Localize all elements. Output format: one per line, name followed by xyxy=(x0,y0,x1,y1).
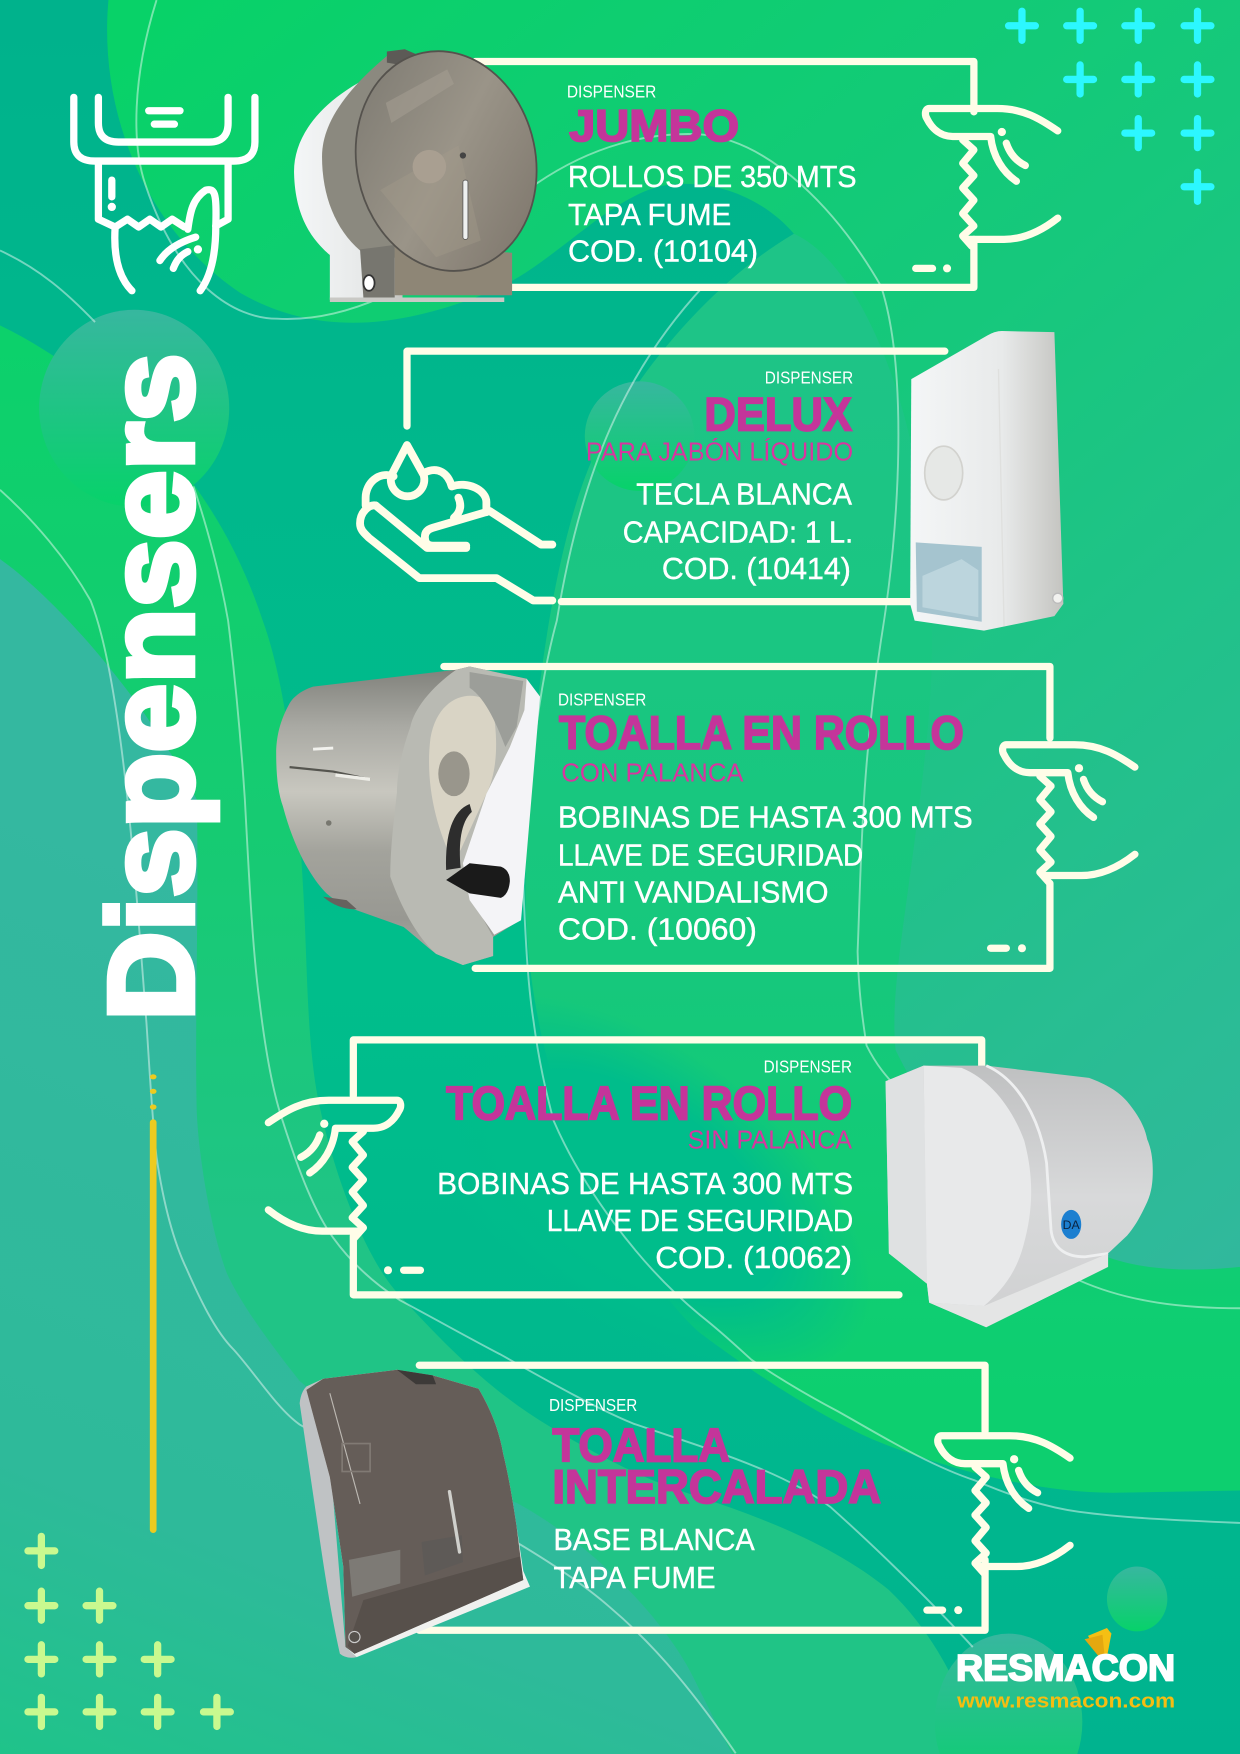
panel 5 text: TAPA FUME xyxy=(553,1562,716,1595)
yellow accent line xyxy=(150,1074,157,1533)
panel 4 text: TOALLA EN ROLLO xyxy=(446,1076,852,1129)
panel 3 text: COD. (10060) xyxy=(558,913,757,946)
panel 5 text: BASE BLANCA xyxy=(553,1524,756,1557)
panel 3 text: TOALLA EN ROLLO xyxy=(559,706,964,759)
panel 5 text: TOALLA xyxy=(552,1418,730,1471)
logo papers icon xyxy=(1085,1628,1111,1658)
panel 4 text: COD. (10062) xyxy=(655,1242,852,1275)
panel 5 text: DISPENSER xyxy=(549,1395,637,1415)
panel 4 text xyxy=(437,1056,853,1275)
panel 3 text: LLAVE DE SEGURIDAD xyxy=(558,839,863,872)
panel 2 text: CAPACIDAD: 1 L. xyxy=(623,516,853,549)
panel 3 text: CON PALANCA xyxy=(561,760,744,788)
panel 2 text: DISPENSER xyxy=(765,368,853,388)
panel 2 soap hand icon xyxy=(360,445,552,600)
panel 1 text: COD. (10104) xyxy=(568,236,758,269)
panel 1: Jumbo xyxy=(294,34,1058,302)
panel 5 text: INTERCALADA xyxy=(552,1460,881,1513)
panel 5 hand icon xyxy=(938,1436,1070,1573)
panel 1 frame xyxy=(475,62,974,287)
panel 5: Toalla intercalada xyxy=(300,1365,1070,1658)
panel 2 text: DELUX xyxy=(704,388,852,441)
panel 1 text: ROLLOS DE 350 MTS xyxy=(568,161,856,194)
panel 2: Delux xyxy=(360,331,1063,631)
product: interleaved towel dispenser xyxy=(300,1370,530,1658)
panel 3 frame xyxy=(444,666,1050,968)
panel 4 text: LLAVE DE SEGURIDAD xyxy=(547,1205,853,1238)
logo badge: DA xyxy=(1063,1218,1081,1232)
panel 2 text: COD. (10414) xyxy=(662,553,851,586)
panel 3 text: DISPENSER xyxy=(558,690,646,710)
panel 4 text: BOBINAS DE HASTA 300 MTS xyxy=(437,1168,853,1201)
panel 3 corner marks xyxy=(991,944,1026,952)
logo website: www.resmacon.com xyxy=(956,1690,1175,1712)
plus grid: bottom left xyxy=(28,1536,230,1726)
logo wordmark: RESMACON xyxy=(956,1648,1175,1689)
panel 5 corner marks xyxy=(927,1606,962,1614)
panel 3 hand icon xyxy=(1003,745,1135,882)
panel 1 corner marks xyxy=(916,264,951,272)
panel 4 text: DISPENSER xyxy=(764,1056,852,1076)
panel 4 frame xyxy=(353,1040,982,1295)
product: roll towel dispenser with lever xyxy=(276,666,540,965)
product: jumbo dispenser xyxy=(294,34,557,302)
panel 2 frame xyxy=(407,351,945,602)
icon: towel dispenser xyxy=(74,97,255,291)
panel 4 text: SIN PALANCA xyxy=(688,1126,853,1154)
panel 2 text: TECLA BLANCA xyxy=(636,478,853,511)
panel 1 text: JUMBO xyxy=(569,102,739,151)
logo badge xyxy=(1061,1210,1081,1239)
panel 1 text: DISPENSER xyxy=(567,81,656,101)
logo: Resmacon xyxy=(956,1628,1175,1712)
panel 1 text xyxy=(567,81,856,269)
panel 5 text xyxy=(549,1395,881,1595)
panel 2 text xyxy=(586,368,853,586)
product: roll towel dispenser without lever xyxy=(886,1066,1153,1327)
panel 3 text: BOBINAS DE HASTA 300 MTS xyxy=(558,801,973,834)
panel 1 text: TAPA FUME xyxy=(568,199,731,232)
panel 3 text: ANTI VANDALISMO xyxy=(558,876,829,909)
panel 3 text xyxy=(558,690,973,946)
panel 4: Toalla en rollo sin palanca xyxy=(268,1040,1153,1327)
plus grid: top right xyxy=(1009,11,1211,201)
soft circles xyxy=(39,310,229,507)
panel 4 hand icon xyxy=(268,1100,401,1238)
panel 1 hand icon xyxy=(925,109,1058,246)
product: delux soap dispenser xyxy=(910,331,1063,631)
title: Dispensers: Dispensers xyxy=(83,353,218,1021)
panel 5 frame xyxy=(419,1365,985,1630)
panel 4 corner marks xyxy=(384,1266,420,1274)
panel 2 text: PARA JABÓN LÍQUIDO xyxy=(586,438,853,467)
panel 3: Toalla en rollo con palanca xyxy=(276,666,1135,968)
